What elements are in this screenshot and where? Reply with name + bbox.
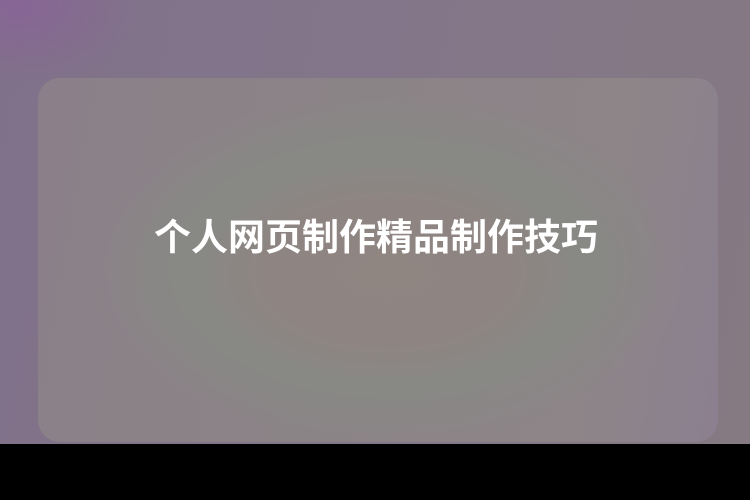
panel: rounded translucent card <box>38 78 718 442</box>
title: 个人网页制作精品制作技巧 <box>154 217 598 258</box>
